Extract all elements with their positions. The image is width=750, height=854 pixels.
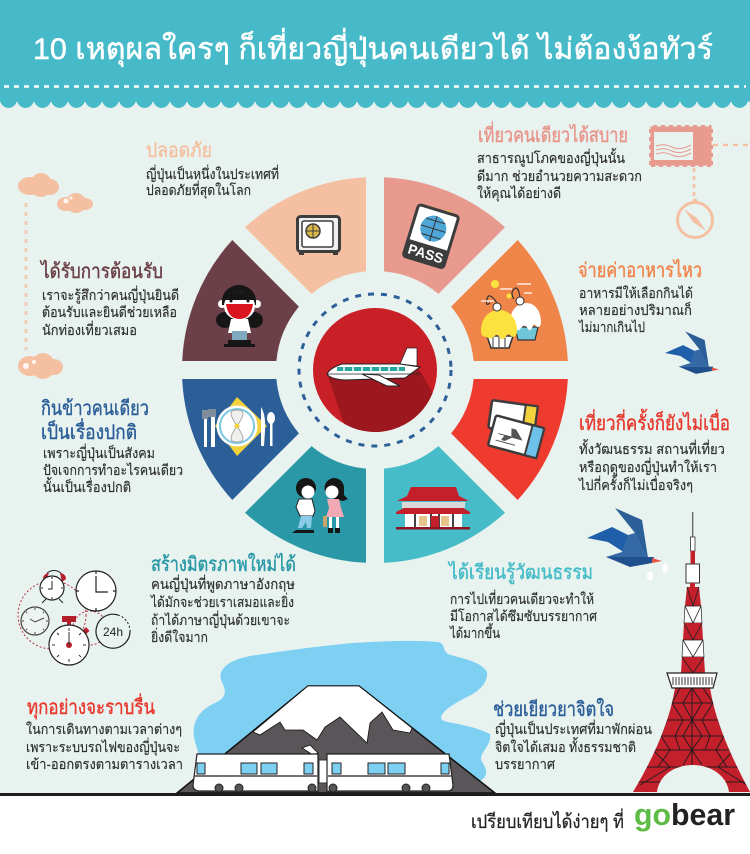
stopwatch <box>49 616 90 665</box>
Mount Fuji <box>177 686 495 793</box>
segment: affordable food <box>451 240 568 361</box>
body: หลายอย่างปริมาณก็ <box>579 301 692 318</box>
body <box>578 439 725 493</box>
icon: tickets <box>488 400 544 458</box>
body <box>477 148 642 202</box>
body: ให้คุณได้อย่างดี <box>477 185 561 202</box>
segment: welcome <box>182 240 299 361</box>
icon: cupcakes <box>481 280 541 348</box>
heading: ได้เรียนรู้วัฒนธรรม <box>447 561 593 585</box>
text block: everything runs smoothly <box>26 693 183 772</box>
body: นั้นเป็นเรื่องปกติ <box>43 477 131 495</box>
segment: safe <box>245 177 366 294</box>
body <box>449 590 597 641</box>
icon: clocks <box>18 570 130 665</box>
segment: new friends <box>245 446 366 563</box>
body: เพราะญี่ปุ่นเป็นสังคม <box>43 444 155 462</box>
body: ปลอดภัยที่สุดในโลก <box>146 181 251 199</box>
text block: comfortable solo travel <box>477 121 642 202</box>
body: เข้า-ออกตรงตามตารางเวลา <box>26 756 183 772</box>
body: ถ้าได้ภาษาญี่ปุ่นด้วยเขาจะ <box>151 611 290 629</box>
center badge: airplane <box>313 308 440 440</box>
Tokyo Tower <box>620 512 750 792</box>
body <box>42 286 179 338</box>
body: นักท่องเที่ยวเสมอ <box>42 321 137 338</box>
left car <box>193 754 318 791</box>
body: ญี่ปุ่นเป็นหนึ่งในประเทศที่ <box>146 165 279 183</box>
alarm clock <box>40 570 66 603</box>
header banner <box>0 0 750 108</box>
body: หรือฤดูของญี่ปุ่นทำให้เรา <box>579 458 717 476</box>
text block: affordable food <box>578 259 702 335</box>
text block: never boring <box>578 409 730 493</box>
heading: เป็นเรื่องปกติ <box>41 418 137 444</box>
body: ได้มากขึ้น <box>449 623 500 641</box>
heading: สร้างมิตรภาพใหม่ได้ <box>151 553 296 576</box>
footer bar <box>0 793 750 854</box>
train <box>193 754 453 792</box>
24 hours clock: 24h <box>103 625 123 639</box>
title: 10 เหตุผลใครๆ ก็เที่ยวญี่ปุ่นคนเดียวได้ ไม่ต้องง้อทัวร์ <box>33 28 713 68</box>
body: ปัจเจกการทำอะไรคนเดียว <box>43 462 183 478</box>
body: บรรยากาศ <box>495 756 555 772</box>
gobear logo: gobear <box>634 797 735 832</box>
body: การไปเที่ยวคนเดียวจะทำให้ <box>450 590 594 607</box>
icon: temple <box>396 487 470 530</box>
body: ญี่ปุ่นเป็นประเทศที่มาพักผ่อน <box>495 720 652 738</box>
body <box>495 720 652 772</box>
body: สาธารณูปโภคของญี่ปุ่นนั้น <box>477 148 625 167</box>
heading: กินข้าวคนเดียว <box>41 398 149 420</box>
body <box>26 721 183 772</box>
heading: เที่ยวคนเดียวได้สบาย <box>478 121 628 147</box>
body: เพราะระบบรถไฟของญี่ปุ่นจะ <box>26 738 180 756</box>
heading: ปลอดภัย <box>146 140 212 162</box>
body: ต้อนรับและยินดีช่วยเหลือ <box>42 304 177 320</box>
icon: large origami bird <box>587 508 668 580</box>
segment: never boring <box>451 379 568 500</box>
icon: two friends <box>292 478 348 533</box>
body: ในการเดินทางตามเวลาต่างๆ <box>26 721 182 737</box>
body: ดีมาก ช่วยอำนวยความสะดวก <box>477 168 642 184</box>
body: เราจะรู้สึกว่าคนญี่ปุ่นยินดี <box>42 286 179 304</box>
segment: learn culture <box>384 446 505 563</box>
right car <box>327 754 453 791</box>
coupling <box>319 760 327 783</box>
wheel of eight segments <box>182 177 568 563</box>
body: จิตใจได้เสมอ ทั้งธรรมชาติ <box>495 737 636 755</box>
heading: จ่ายค่าอาหารไหว <box>578 259 702 282</box>
lattice <box>638 688 746 786</box>
decoration: clouds and dashed line <box>18 173 93 379</box>
body <box>578 285 693 335</box>
icon: safe box <box>298 216 340 255</box>
body: อาหารมีให้เลือกกินได้ <box>579 285 693 301</box>
compass icon <box>678 198 712 238</box>
body <box>146 165 279 199</box>
observation deck <box>667 673 717 688</box>
body: คนญี่ปุ่นที่พูดภาษาอังกฤษ <box>151 575 295 593</box>
text block: welcome <box>39 260 179 338</box>
background sky blob <box>194 641 490 790</box>
small clock <box>21 607 49 635</box>
body: มีโอกาสได้ซึมซับบรรยากาศ <box>450 608 597 624</box>
body: ไม่มากเกินไป <box>578 319 645 335</box>
stamp icon <box>649 125 750 200</box>
segment: dining alone <box>182 379 299 500</box>
icon: plate and cutlery <box>202 397 275 456</box>
wheels <box>215 784 430 792</box>
icon: greeting girl <box>216 285 263 347</box>
text block: new friends <box>150 553 296 645</box>
heading: ได้รับการต้อนรับ <box>39 260 163 283</box>
heading <box>41 398 149 444</box>
heading: ช่วยเยียวยาจิตใจ <box>493 698 614 721</box>
body: ทั้งวัฒนธรรม สถานที่เที่ยว <box>579 439 725 457</box>
antenna and upper mast <box>681 512 705 673</box>
icon: passport: PASS <box>406 241 445 266</box>
icon: small origami bird <box>665 331 719 374</box>
wall clock <box>76 571 116 611</box>
text block: learn culture <box>447 561 597 641</box>
body: ยิ่งดีใจมาก <box>151 628 208 645</box>
segment: comfortable solo travel <box>384 177 505 294</box>
body <box>43 444 183 495</box>
text block: healing <box>493 698 652 772</box>
footer tagline: เปรียบเทียบได้ง่ายๆ ที่ <box>471 808 624 833</box>
body <box>150 575 295 645</box>
body: ไปกี่ครั้งก็ไม่เบื่อจริงๆ <box>578 475 693 493</box>
lower legs <box>633 688 750 792</box>
text block: safe <box>146 140 279 199</box>
heading: ทุกอย่างจะราบรื่น <box>27 693 155 720</box>
text block: dining alone <box>41 398 183 495</box>
body: ได้มักจะช่วยเราเสมอและยิ่ง <box>150 593 294 610</box>
center dashed ring <box>299 294 451 446</box>
